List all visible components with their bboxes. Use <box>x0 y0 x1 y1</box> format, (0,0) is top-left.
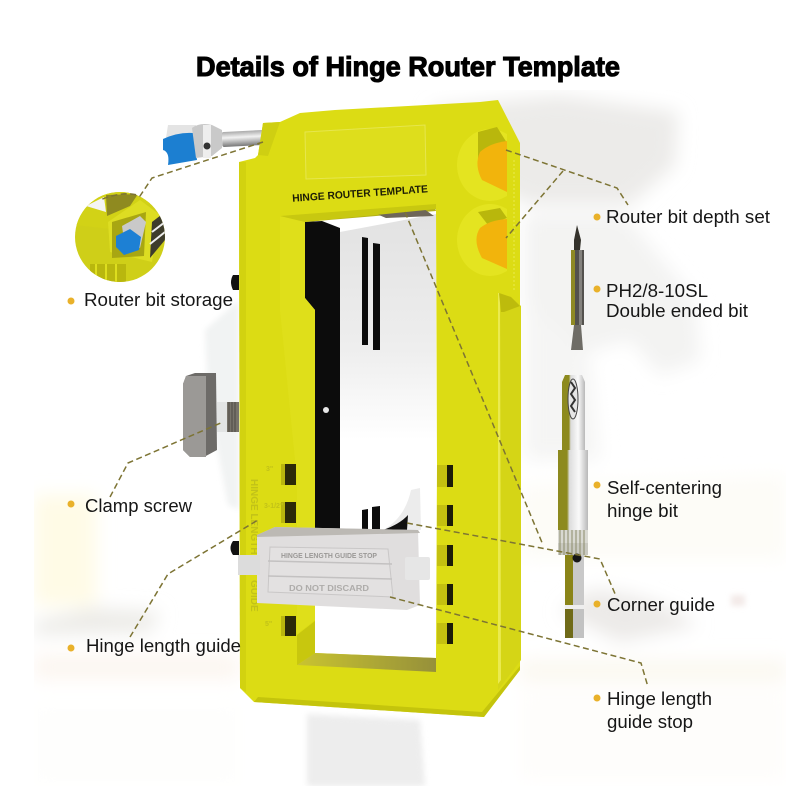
double ended bit <box>571 225 584 350</box>
embossed scale marks on body: 3-1/2" <box>264 503 283 510</box>
leader: router bit storage <box>100 142 263 200</box>
window opening <box>305 209 437 658</box>
label: self-centering hinge bit <box>594 478 722 521</box>
hinge length guide stop <box>238 488 430 610</box>
label: clamp screw: Clamp screw <box>85 496 193 516</box>
label: double ended bit: PH2/8-10SL <box>606 281 708 301</box>
label: corner guide: Corner guide <box>607 595 715 615</box>
inset circle: router bit storage detail <box>75 192 165 282</box>
leader: hinge length guide stop <box>390 597 648 687</box>
length slots, right <box>437 465 453 487</box>
router bit: blue cutter on chrome shank <box>163 124 265 165</box>
self-centering hinge bit <box>558 375 588 638</box>
label: hinge length guide: Hinge length guide <box>86 636 241 656</box>
clamp nubs on left edge <box>230 275 239 555</box>
label: hinge length guide stop: Hinge length <box>607 689 712 709</box>
leader: router bit depth set <box>506 150 628 205</box>
embossed scale marks on body: 3" <box>266 466 273 473</box>
label: double ended bit <box>594 281 748 321</box>
main yellow template body <box>239 100 523 717</box>
leader: corner guide <box>407 523 616 596</box>
left frame lighter facet <box>280 216 315 634</box>
label: self-centering hinge bit: hinge bit <box>607 501 678 521</box>
hinge length guide stop: DO NOT DISCARD <box>289 584 369 593</box>
leader lines <box>100 142 648 687</box>
hinge length guide stop: HINGE LENGTH GUIDE STOP <box>281 553 377 560</box>
embossed label plate <box>305 125 426 179</box>
embossed scale marks on body: 5" <box>265 621 272 628</box>
label: double ended bit: Double ended bit <box>606 301 748 321</box>
black slots <box>362 237 368 345</box>
clamp screw <box>183 373 239 457</box>
leader: clamp screw <box>110 422 223 497</box>
title: Details of Hinge Router Template <box>196 51 620 82</box>
label: router bit storage: Router bit storage <box>84 290 233 310</box>
faded shirt inside window <box>340 214 436 440</box>
embossed scale marks on body: HINGE LENGTH <box>248 479 259 555</box>
label: hinge length guide stop: guide stop <box>607 712 693 732</box>
right side channel <box>498 293 521 690</box>
embossed scale marks on body <box>248 466 283 628</box>
template name printed on body: HINGE ROUTER TEMPLATE <box>292 183 428 205</box>
leader: depth set second pocket <box>506 171 563 238</box>
bit pockets <box>457 129 507 276</box>
leader: self-centering hinge bit <box>405 212 543 545</box>
embossed scale marks on body: GUIDE <box>248 580 259 612</box>
bottom ledge of window <box>297 653 436 672</box>
label: self-centering hinge bit: Self-centering <box>607 478 722 498</box>
label: hinge length guide stop <box>594 689 712 732</box>
leader: hinge length guide <box>130 520 258 637</box>
black guide strip <box>305 221 340 530</box>
length slots, left <box>281 464 296 485</box>
label: router bit depth set: Router bit depth set <box>606 207 770 227</box>
